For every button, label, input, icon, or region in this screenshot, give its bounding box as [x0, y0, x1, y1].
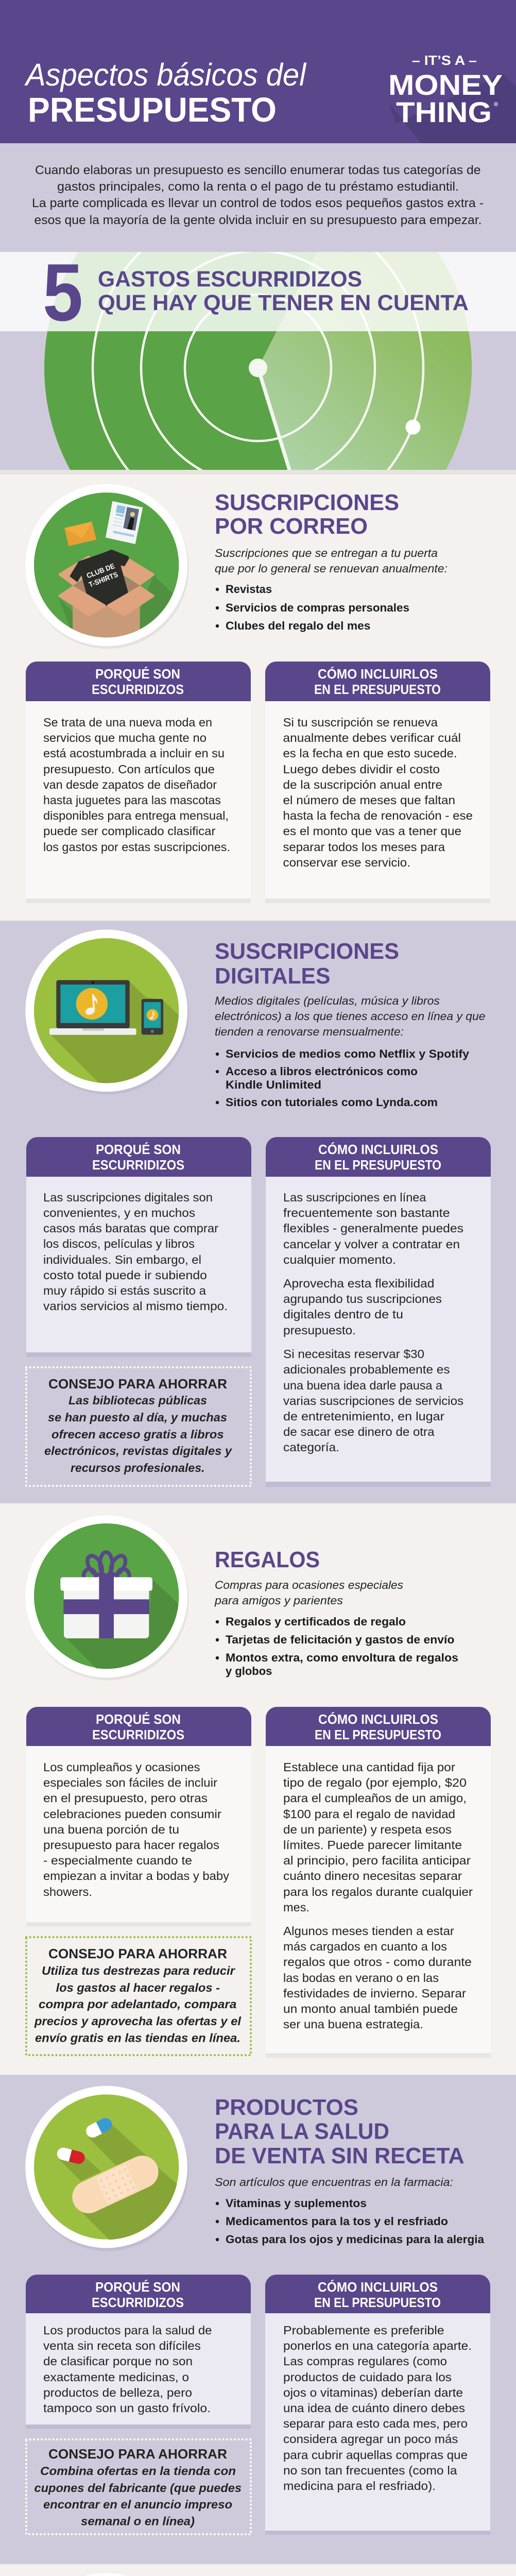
panel: porqué son escurridizos: PORQUÉ SON — [95, 2279, 180, 2295]
panel: porqué son escurridizos: está acostumbrada a incluir en su — [43, 747, 225, 760]
panel: cómo incluirlos en el presupuesto: ser una buena estrategia. — [283, 2018, 423, 2031]
panel: cómo incluirlos en el presupuesto: de un pariente) y respeta esos — [283, 1823, 452, 1836]
panel: porqué son escurridizos: Las suscripciones digitales son — [43, 1191, 213, 1204]
panel: porqué son escurridizos: convenientes, y en muchos — [43, 1206, 195, 1219]
description — [215, 547, 448, 575]
heading: regalos: REGALOS — [215, 1547, 320, 1572]
section 3: regalos — [25, 1516, 491, 2058]
callout: consejo para ahorrar: CONSEJO PARA AHORRAR — [48, 2446, 227, 2462]
panel: porqué son escurridizos — [26, 662, 251, 903]
panel: cómo incluirlos en el presupuesto: festividades de invierno. Separar — [283, 1987, 466, 2000]
heading: suscripciones por correo — [215, 490, 399, 539]
callout: consejo para ahorrar: Combina ofertas en la tienda con — [40, 2464, 236, 2478]
panel: cómo incluirlos en el presupuesto — [266, 1707, 491, 2058]
panel: cómo incluirlos en el presupuesto: flexibles - generalmente puedes — [283, 1222, 463, 1235]
callout: consejo para ahorrar: electrónicos, revistas digitales y — [44, 1444, 232, 1458]
panel: cómo incluirlos en el presupuesto: un monto anual también puede — [283, 2002, 458, 2015]
panel: cómo incluirlos en el presupuesto: de la suscripción anual entre — [283, 778, 442, 791]
panel: porqué son escurridizos: una buena porción de tu — [43, 1823, 179, 1836]
bullet list: Gotas para los ojos y medicinas para la alergia — [226, 2233, 485, 2246]
panel: porqué son escurridizos: en el presupuesto, pero otras — [43, 1791, 208, 1805]
panel: cómo incluirlos en el presupuesto: Establece una cantidad fija por — [283, 1760, 455, 1774]
callout: consejo para ahorrar: CONSEJO PARA AHORRAR — [48, 1946, 227, 1961]
callout: consejo para ahorrar: se han puesto al día, y muchas — [48, 1411, 227, 1424]
callout: consejo para ahorrar: recursos profesionales. — [71, 1461, 205, 1475]
panel: cómo incluirlos en el presupuesto — [265, 662, 490, 903]
bullet list: Tarjetas de felicitación y gastos de envío — [226, 1633, 454, 1646]
panel: porqué son escurridizos — [26, 2275, 251, 2429]
description: Medios digitales (películas, música y libros — [215, 994, 440, 1007]
panel: cómo incluirlos en el presupuesto: cuánto dinero necesitas separar — [283, 1869, 462, 1883]
icon: laptop and phone — [25, 929, 189, 1096]
description — [214, 1579, 403, 1607]
intro text: esos que la mayoría de la gente olvida incluir en su presupuesto para empezar. — [34, 213, 482, 227]
intro text — [32, 163, 484, 227]
panel: cómo incluirlos en el presupuesto: límites. Puede parecer limitante — [283, 1838, 462, 1852]
bullet list: Medicamentos para la tos y el resfriado — [226, 2215, 448, 2228]
panel: porqué son escurridizos — [26, 1707, 251, 1926]
section 2: suscripciones digitales — [0, 921, 516, 1503]
panel: porqué son escurridizos: Se trata de una nueva moda en — [43, 716, 212, 729]
heading: productos para la salud de venta sin receta: DE VENTA SIN RECETA — [215, 2143, 465, 2168]
intro text: La parte complicada es llevar un control de todos esos pequeños gastos extra - — [32, 196, 484, 210]
panel: cómo incluirlos en el presupuesto: anualmente debes verificar cuál — [283, 731, 461, 744]
callout: consejo para ahorrar: compra por adelantado, compara — [39, 1997, 237, 2011]
panel: cómo incluirlos en el presupuesto: separar todos los meses para — [283, 840, 445, 854]
panel: cómo incluirlos en el presupuesto: CÓMO INCLUIRLOS — [318, 666, 438, 682]
panel: cómo incluirlos en el presupuesto: una buena idea darle pausa a — [283, 1379, 442, 1392]
panel: cómo incluirlos en el presupuesto: cualquier momento. — [283, 1253, 396, 1266]
panel: cómo incluirlos en el presupuesto: el número de meses que faltan — [283, 793, 455, 807]
bullet list — [216, 583, 409, 632]
bullet list — [216, 2197, 485, 2246]
panel: cómo incluirlos en el presupuesto: Si necesitas reservar $30 — [283, 1347, 424, 1361]
bullet list — [216, 1615, 458, 1677]
intro text: Cuando elaboras un presupuesto es sencillo enumerar todas tus categorías de — [35, 163, 480, 177]
bullet list: Vitaminas y suplementos — [226, 2197, 367, 2210]
callout: consejo para ahorrar: envío gratis en las tiendas en línea. — [35, 2031, 240, 2044]
panel: porqué son escurridizos: venta sin receta son difíciles — [43, 2339, 201, 2352]
panel: porqué son escurridizos: exactamente medicinas, o — [43, 2370, 189, 2384]
panel: cómo incluirlos en el presupuesto: hasta la fecha de renovación - ese — [283, 809, 473, 822]
heading: 5 gastos escurridizos: QUE HAY QUE TENER EN CUENTA — [98, 291, 469, 315]
panel: cómo incluirlos en el presupuesto — [266, 1137, 491, 1487]
description: electrónicos) a los que tienes acceso en línea y que — [215, 1010, 485, 1023]
panel: porqué son escurridizos: los discos, películas y libros — [43, 1237, 195, 1250]
callout: consejo para ahorrar — [26, 1367, 251, 1486]
heading: productos para la salud de venta sin receta: PARA LA SALUD — [215, 2119, 389, 2144]
panel: cómo incluirlos en el presupuesto: ponerlos en una categoría aparte. — [283, 2339, 472, 2352]
callout: consejo para ahorrar: encontrar en el anuncio impreso — [43, 2498, 232, 2511]
panel: cómo incluirlos en el presupuesto: para el cumpleaños de un amigo, — [283, 1791, 467, 1805]
panel: porqué son escurridizos: ESCURRIDIZOS — [92, 1157, 184, 1173]
description: Suscripciones que se entregan a tu puerta — [215, 547, 438, 560]
panel: cómo incluirlos en el presupuesto: es la fecha en que esto sucede. — [283, 747, 457, 760]
panel: porqué son escurridizos: los gastos por estas suscripciones. — [43, 840, 230, 854]
bullet list: Clubes del regalo del mes — [226, 619, 371, 632]
intro text: gastos principales, como la renta o el pago de tu préstamo estudiantil. — [57, 180, 459, 194]
description: para amigos y parientes — [214, 1594, 343, 1607]
heading: suscripciones por correo: POR CORREO — [215, 514, 368, 539]
panel: cómo incluirlos en el presupuesto: más cargados en cuanto a los — [283, 1940, 447, 1953]
logo: It's a Money Thing — [388, 53, 503, 128]
panel: cómo incluirlos en el presupuesto: es el monto que vas a tener que — [283, 824, 461, 838]
panel: cómo incluirlos en el presupuesto: cancelar y volver a contratar en — [283, 1238, 460, 1251]
panel: porqué son escurridizos: van desde zapatos de diseñador — [43, 778, 217, 791]
panel: cómo incluirlos en el presupuesto: digitales dentro de tu — [283, 1308, 403, 1321]
section 4: productos para la salud — [0, 2075, 516, 2564]
panel: cómo incluirlos en el presupuesto: no son tan frecuentes (como la — [283, 2464, 457, 2477]
panel: cómo incluirlos en el presupuesto: ojos o vitaminas) deberían darte — [283, 2386, 463, 2399]
icon: mail subscription box: T-SHIRTS — [88, 570, 119, 589]
description: Compras para ocasiones especiales — [215, 1579, 403, 1591]
panel: cómo incluirlos en el presupuesto: tipo de regalo (por ejemplo, $20 — [283, 1776, 467, 1789]
bullet list: y globos — [226, 1665, 272, 1677]
panel: porqué son escurridizos: celebraciones pueden consumir — [43, 1807, 221, 1821]
panel: cómo incluirlos en el presupuesto: presupuesto. — [283, 1324, 356, 1337]
heading: 5 gastos escurridizos — [43, 247, 469, 338]
panel: cómo incluirlos en el presupuesto: de sacar ese dinero de otra — [283, 1425, 435, 1438]
panel: porqué son escurridizos: empiezan a invitar a bodas y baby — [43, 1869, 230, 1883]
description: que por lo general se renuevan anualmente: — [215, 562, 448, 575]
bullet list — [216, 1047, 470, 1109]
panel: cómo incluirlos en el presupuesto: medicina para el resfriado). — [283, 2479, 436, 2493]
panel: porqué son escurridizos: costo total puede ir subiendo — [43, 1268, 207, 1282]
panel: cómo incluirlos en el presupuesto — [265, 2275, 490, 2535]
panel: porqué son escurridizos: productos de belleza, pero — [43, 2386, 192, 2399]
bullet list: Kindle Unlimited — [226, 1078, 321, 1091]
heading: suscripciones digitales — [215, 939, 399, 989]
panel: cómo incluirlos en el presupuesto: EN EL PRESUPUESTO — [314, 682, 441, 697]
bullet list: Sitios con tutoriales como Lynda.com — [226, 1096, 438, 1109]
panel: porqué son escurridizos: servicios que mucha gente no — [43, 731, 207, 744]
panel: cómo incluirlos en el presupuesto: mes. — [283, 1901, 309, 1914]
title: Aspectos básicos del presupuesto — [24, 57, 306, 129]
callout: consejo para ahorrar: semanal o en línea) — [81, 2514, 195, 2528]
panel: porqué son escurridizos — [26, 1137, 251, 1357]
panel: porqué son escurridizos: varios servicios al mismo tiempo. — [43, 1299, 228, 1313]
panel: porqué son escurridizos: - especialmente cuando te — [43, 1854, 192, 1867]
section 1: suscripciones por correo — [0, 470, 516, 921]
panel: cómo incluirlos en el presupuesto: al principio, pero facilita anticipar — [283, 1854, 471, 1867]
heading band — [0, 252, 516, 331]
panel: cómo incluirlos en el presupuesto: EN EL PRESUPUESTO — [315, 1157, 441, 1173]
icon: pills and bandage — [25, 2086, 189, 2253]
heading: suscripciones digitales: DIGITALES — [215, 963, 331, 989]
panel: porqué son escurridizos: ESCURRIDIZOS — [92, 682, 184, 697]
logo long shadow — [389, 74, 516, 143]
panel: porqué son escurridizos: PORQUÉ SON — [95, 666, 180, 682]
panel: cómo incluirlos en el presupuesto: frecuentemente son bastante — [283, 1206, 450, 1219]
heading: productos para la salud de venta sin receta — [215, 2095, 465, 2168]
panel: porqué son escurridizos: ESCURRIDIZOS — [92, 1727, 184, 1742]
panel: cómo incluirlos en el presupuesto: Si tu suscripción se renueva — [283, 716, 438, 729]
panel: cómo incluirlos en el presupuesto: Luego debes dividir el costo — [283, 762, 440, 776]
panel: porqué son escurridizos: de clasificar porque no son — [43, 2354, 193, 2368]
panel: cómo incluirlos en el presupuesto: considera agregar un poco más — [283, 2432, 458, 2446]
description: Son artículos que encuentras en la farmacia: — [215, 2176, 453, 2189]
panel: cómo incluirlos en el presupuesto: Aprovecha esta flexibilidad — [283, 1277, 435, 1290]
panel: cómo incluirlos en el presupuesto: para cubrir aquellas compras que — [283, 2448, 468, 2462]
logo: It's a Money Thing: THING — [396, 96, 492, 128]
panel: cómo incluirlos en el presupuesto: Probablemente es preferible — [283, 2324, 444, 2337]
panel: cómo incluirlos en el presupuesto: productos de cuidado para los — [283, 2370, 452, 2384]
callout: consejo para ahorrar: CONSEJO PARA AHORRAR — [48, 1376, 227, 1392]
header banner — [0, 0, 516, 143]
panel: cómo incluirlos en el presupuesto: EN EL PRESUPUESTO — [315, 1727, 441, 1742]
panel: cómo incluirlos en el presupuesto: adicionales probablemente es — [283, 1363, 450, 1376]
icon: gift box — [25, 1515, 189, 1682]
heading: productos para la salud de venta sin receta: PRODUCTOS — [215, 2095, 358, 2120]
icon: mail subscription box: CLUB DE — [85, 562, 116, 580]
panel: porqué son escurridizos: individuales. Sin embargo, el — [43, 1253, 201, 1266]
callout: consejo para ahorrar: precios y aprovecha las ofertas y el — [34, 2014, 242, 2028]
panel: cómo incluirlos en el presupuesto: Las compras regulares (como — [283, 2354, 447, 2368]
panel: cómo incluirlos en el presupuesto: CÓMO INCLUIRLOS — [318, 1711, 438, 1727]
panel: cómo incluirlos en el presupuesto: varias suscripciones de servicios — [283, 1394, 463, 1408]
panel: porqué son escurridizos: disponibles para entrega mensual, — [43, 809, 229, 822]
panel: cómo incluirlos en el presupuesto: $100 para el regalo de navidad — [283, 1807, 455, 1821]
panel: cómo incluirlos en el presupuesto: categoría. — [283, 1440, 339, 1454]
panel: cómo incluirlos en el presupuesto: regalos que otros - como durante — [283, 1955, 472, 1969]
bullet list: Acceso a libros electrónicos como — [226, 1065, 418, 1078]
panel: porqué son escurridizos: hasta juguetes para las mascotas — [43, 793, 221, 807]
logo: It's a Money Thing: – IT’S A – — [412, 53, 477, 68]
heading: 5 gastos escurridizos: GASTOS ESCURRIDIZOS — [98, 267, 362, 292]
panel: porqué son escurridizos: Los productos para la salud de — [43, 2324, 212, 2337]
panel: porqué son escurridizos: presupuesto. Con artículos que — [43, 762, 215, 776]
panel: porqué son escurridizos: presupuesto para hacer regalos — [43, 1838, 219, 1852]
logo: It's a Money Thing: MONEY — [388, 69, 503, 101]
callout: consejo para ahorrar: Utiliza tus destrezas para reducir — [42, 1964, 235, 1977]
icon: crowdfunding button — [85, 2573, 128, 2576]
callout: consejo para ahorrar: ofrecen acceso gratis a libros — [51, 1428, 223, 1441]
panel: porqué son escurridizos: puede ser complicado clasificar — [43, 824, 216, 838]
panel: porqué son escurridizos: Los cumpleaños y ocasiones — [43, 1760, 200, 1774]
panel: cómo incluirlos en el presupuesto: las bodas en verano o en las — [283, 1971, 439, 1985]
bullet list: Montos extra, como envoltura de regalos — [226, 1651, 458, 1664]
title: Aspectos básicos del presupuesto: PRESUPUESTO — [28, 91, 277, 129]
heading: suscripciones por correo: SUSCRIPCIONES — [215, 490, 399, 515]
panel: cómo incluirlos en el presupuesto: una idea de cuánto dinero debes — [283, 2401, 465, 2415]
bullet list: Servicios de compras personales — [226, 601, 409, 614]
panel: cómo incluirlos en el presupuesto: conservar ese servicio. — [283, 856, 410, 869]
panel: cómo incluirlos en el presupuesto: CÓMO INCLUIRLOS — [318, 2279, 438, 2295]
panel: porqué son escurridizos: PORQUÉ SON — [96, 1142, 181, 1157]
title: Aspectos básicos del presupuesto: Aspectos básicos del — [24, 57, 306, 92]
logo: It's a Money Thing: ® — [494, 101, 498, 108]
panel: cómo incluirlos en el presupuesto: CÓMO INCLUIRLOS — [318, 1142, 438, 1157]
panel: cómo incluirlos en el presupuesto: agrupando tus suscripciones — [283, 1292, 442, 1306]
panel: porqué son escurridizos: PORQUÉ SON — [96, 1711, 181, 1727]
callout: consejo para ahorrar: Las bibliotecas públicas — [68, 1394, 207, 1407]
panel: porqué son escurridizos: muy rápido si estás suscrito a — [43, 1284, 206, 1297]
description — [215, 994, 485, 1038]
panel: porqué son escurridizos: especiales son fáciles de incluir — [43, 1776, 217, 1789]
callout: consejo para ahorrar — [26, 2439, 251, 2534]
icon: mail subscription box — [25, 484, 189, 651]
intro panel — [0, 143, 516, 470]
callout: consejo para ahorrar — [26, 1937, 251, 2055]
panel: cómo incluirlos en el presupuesto: para los regalos durante cualquier — [283, 1885, 473, 1899]
panel: porqué son escurridizos: showers. — [43, 1885, 92, 1899]
callout: consejo para ahorrar: los gastos al hacer regalos - — [56, 1981, 220, 1994]
section 5: financiación colectiva — [85, 2573, 128, 2576]
bullet list: Revistas — [226, 583, 272, 596]
panel: cómo incluirlos en el presupuesto: EN EL PRESUPUESTO — [314, 2295, 441, 2310]
panel: porqué son escurridizos: tampoco son un gasto frívolo. — [43, 2401, 211, 2415]
callout: consejo para ahorrar: cupones del fabricante (que puedes — [34, 2481, 242, 2495]
heading: suscripciones digitales: SUSCRIPCIONES — [215, 939, 399, 964]
bullet list: Servicios de medios como Netflix y Spotify — [226, 1047, 470, 1060]
radar graphic — [44, 252, 472, 470]
panel: cómo incluirlos en el presupuesto: Las suscripciones en línea — [283, 1191, 426, 1204]
panel: porqué son escurridizos: ESCURRIDIZOS — [92, 2295, 184, 2310]
description: tienden a renovarse mensualmente: — [215, 1025, 404, 1038]
bullet list: Regalos y certificados de regalo — [226, 1615, 406, 1628]
panel: cómo incluirlos en el presupuesto: de entretenimiento, en lugar — [283, 1410, 444, 1423]
panel: cómo incluirlos en el presupuesto: separar para esto cada mes, pero — [283, 2417, 468, 2430]
heading: 5 gastos escurridizos: 5 — [43, 247, 83, 338]
panel: cómo incluirlos en el presupuesto: Algunos meses tienden a estar — [283, 1924, 454, 1938]
panel: porqué son escurridizos: casos más baratas que comprar — [43, 1222, 218, 1235]
